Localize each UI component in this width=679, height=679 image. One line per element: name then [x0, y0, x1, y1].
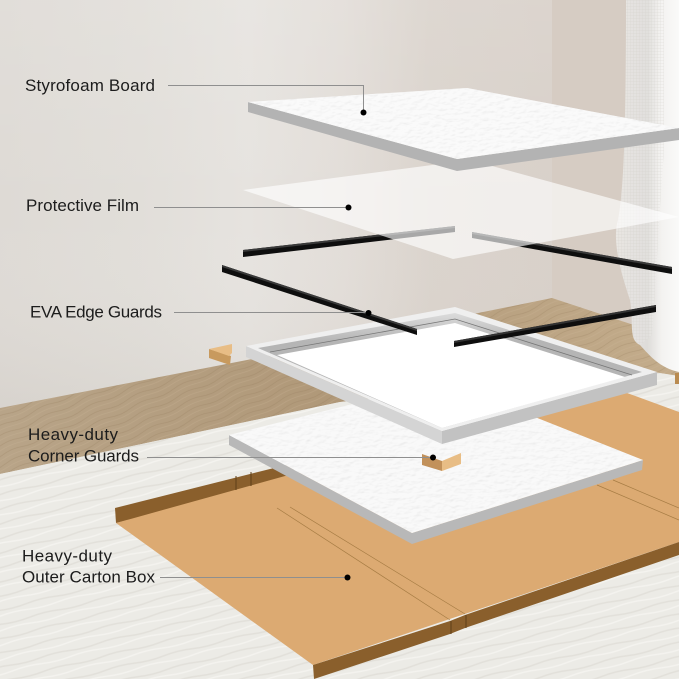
right wall: [552, 0, 679, 345]
carton front wall left: [313, 542, 679, 679]
outer carton box: [115, 393, 679, 679]
frame left outer face: [246, 346, 442, 444]
frame top rim: [246, 307, 657, 431]
callout: protective film: [26, 196, 352, 215]
carton surface: [116, 393, 679, 665]
white panel: [277, 323, 625, 428]
callout: corner guards: Corner Guards: [28, 446, 139, 466]
callout: outer carton box: Outer Carton Box: [22, 568, 156, 586]
edge guard lower left: [222, 265, 417, 335]
right corner guard fragment: [675, 373, 679, 384]
callout: styrofoam board: Styrofoam Board: [25, 76, 155, 95]
callout: styrofoam board: [25, 76, 366, 116]
callout: outer carton box: Heavy-duty: [22, 546, 112, 566]
lower styrofoam board: [229, 381, 643, 544]
edge guard upper left: [243, 226, 455, 257]
rug: [0, 370, 679, 679]
back corner guard: [209, 344, 232, 365]
callout: corner guards: [28, 425, 436, 466]
edge guard lower right: [454, 305, 656, 347]
carton back wall: [115, 464, 300, 523]
callout: EVA edge guards: EVA Edge Guards: [30, 302, 162, 322]
callout: outer carton box: [22, 546, 350, 586]
left wall: [0, 0, 552, 420]
curtain: [616, 0, 679, 372]
callout: EVA edge guards: [30, 302, 372, 322]
callout: protective film: Protective Film: [26, 196, 139, 215]
protective film: [243, 160, 679, 259]
frame inner walls: [258, 313, 642, 428]
wood floor: [0, 298, 679, 474]
corner guard on board: [422, 453, 461, 471]
edge guards: [222, 226, 672, 347]
edge guard upper right: [472, 232, 672, 274]
white frame: [246, 307, 657, 444]
callout: corner guards: Heavy-duty: [28, 425, 118, 444]
frame right outer face: [442, 372, 657, 444]
top styrofoam board: [248, 88, 679, 171]
